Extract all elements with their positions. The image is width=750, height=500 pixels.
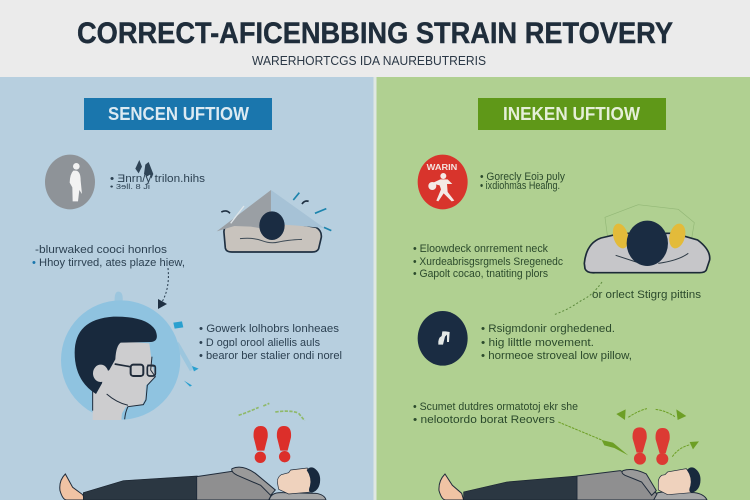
small figure: [135, 160, 153, 179]
text block 1: • Ǝnrn/ý trilon.hihs: [110, 173, 206, 185]
text block 7: [413, 401, 578, 426]
text: correct sleeping position: or orlect Stigrg pittins: [592, 289, 702, 301]
text block 5: • Eloowdeck onrrement neck: [413, 243, 548, 255]
right heading: INEKEN UFTIOW: [503, 104, 640, 124]
text block 6: • Rsigmdonir orghedened.: [481, 323, 615, 335]
subtitle: WARERHORTCGS IDA NAUREBUTRERIS: [252, 53, 486, 68]
warning marks: [254, 426, 291, 463]
icon: correct pillow: [584, 205, 710, 273]
title: CORRECT-AFICENBBING STRAIN RETOVERY: [77, 17, 673, 50]
icon: dark movement: [418, 311, 468, 366]
text block 2: • Hhoy tirrved, ates plaze hiew,: [32, 257, 185, 269]
icon: grey posture: [45, 155, 95, 209]
text block 6: • hormeoe stroveal low pillow,: [481, 350, 632, 362]
text block 4: • Gorecly Eoi϶ pυly: [480, 171, 565, 183]
icon: warning: [418, 155, 468, 209]
portrait: [61, 292, 199, 420]
warning marks: [633, 427, 670, 465]
left heading: SENCEN UFTIOW: [108, 104, 249, 124]
divider: [374, 77, 376, 500]
text block 3: • Gowerk lolhobrs lonheaes: [199, 323, 340, 335]
lying person: [439, 467, 707, 500]
icon: tent pillow: [217, 190, 331, 252]
text block 3: • bearor ber stalier ondi norel: [199, 350, 342, 362]
green arrows: [558, 409, 699, 457]
text block 5: [413, 243, 563, 280]
header band: [0, 0, 750, 77]
text block 2: [32, 244, 185, 269]
green arrows: [239, 403, 305, 421]
text block 7: • nelootordo borat Reovers: [413, 414, 556, 426]
text block 2: -blurwaked cooci honrlos: [35, 244, 168, 256]
text block 6: [481, 323, 632, 362]
panel: left: [0, 77, 374, 500]
dotted connector: [553, 282, 602, 315]
text block 3: • D ogɒl orool aliellis auls: [199, 337, 320, 349]
text block 5: • Xurdeabrisgsrgmels Sregenedc: [413, 256, 563, 268]
text block 4: • ixdiohmas Healng.: [480, 180, 560, 192]
dashed arrow: [158, 268, 168, 309]
text block 3: [199, 323, 342, 362]
left heading: [84, 98, 272, 130]
panel: right: [376, 77, 750, 500]
right heading: [478, 98, 666, 130]
text block 1: • 3ɘll. 8 Ji: [110, 184, 151, 191]
text block 5: • Gapolt cocao, tnatiting plors: [413, 268, 548, 280]
text block 4: [480, 171, 565, 192]
icon: warning: WARIN: [427, 163, 458, 172]
text block 1: [110, 173, 206, 191]
lying person: [60, 467, 326, 500]
text block 6: • hig lilttle movement.: [481, 337, 594, 349]
text block 7: • Scumet dutdres ormatotoj ekr she: [413, 401, 578, 413]
